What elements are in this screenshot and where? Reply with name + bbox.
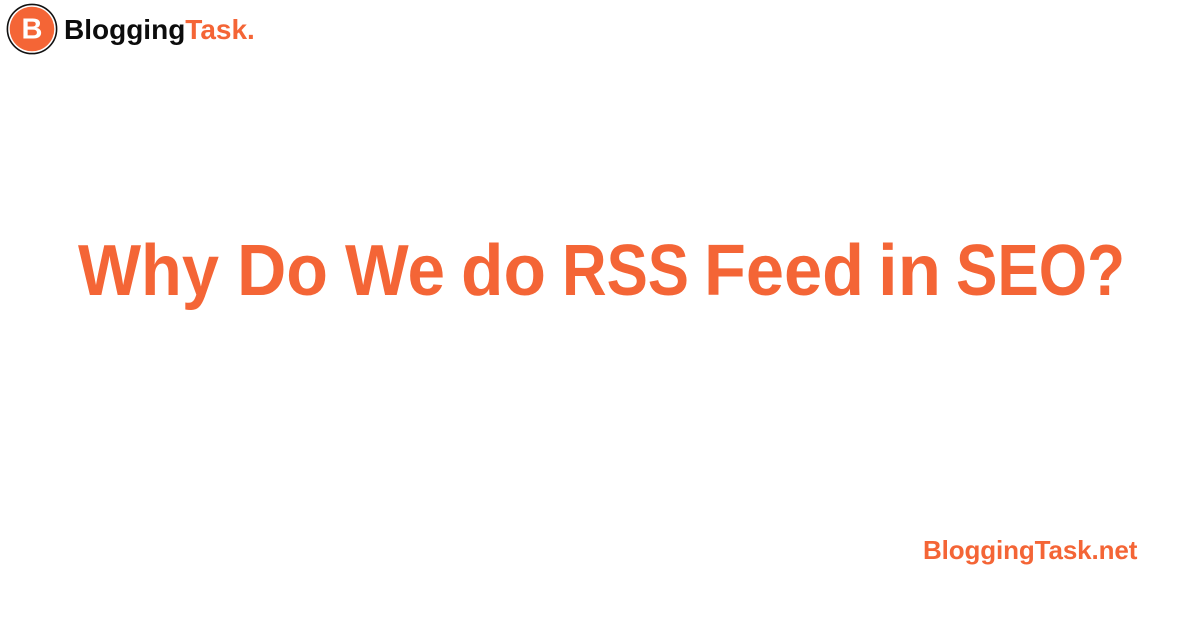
- icon: logo badge: B: [22, 14, 42, 46]
- title: Feed: [704, 231, 864, 310]
- website url: BloggingTask.net: [923, 535, 1137, 565]
- logo: [6, 4, 255, 54]
- title: RSS: [562, 231, 689, 310]
- icon: logo badge: [6, 4, 58, 54]
- title: Why: [78, 231, 219, 310]
- logo wordmark: BloggingTask.: [64, 14, 255, 45]
- title: [78, 231, 1125, 310]
- title: do: [461, 231, 546, 310]
- title: We: [345, 231, 445, 310]
- title: in: [878, 231, 941, 310]
- title: Do: [237, 231, 328, 310]
